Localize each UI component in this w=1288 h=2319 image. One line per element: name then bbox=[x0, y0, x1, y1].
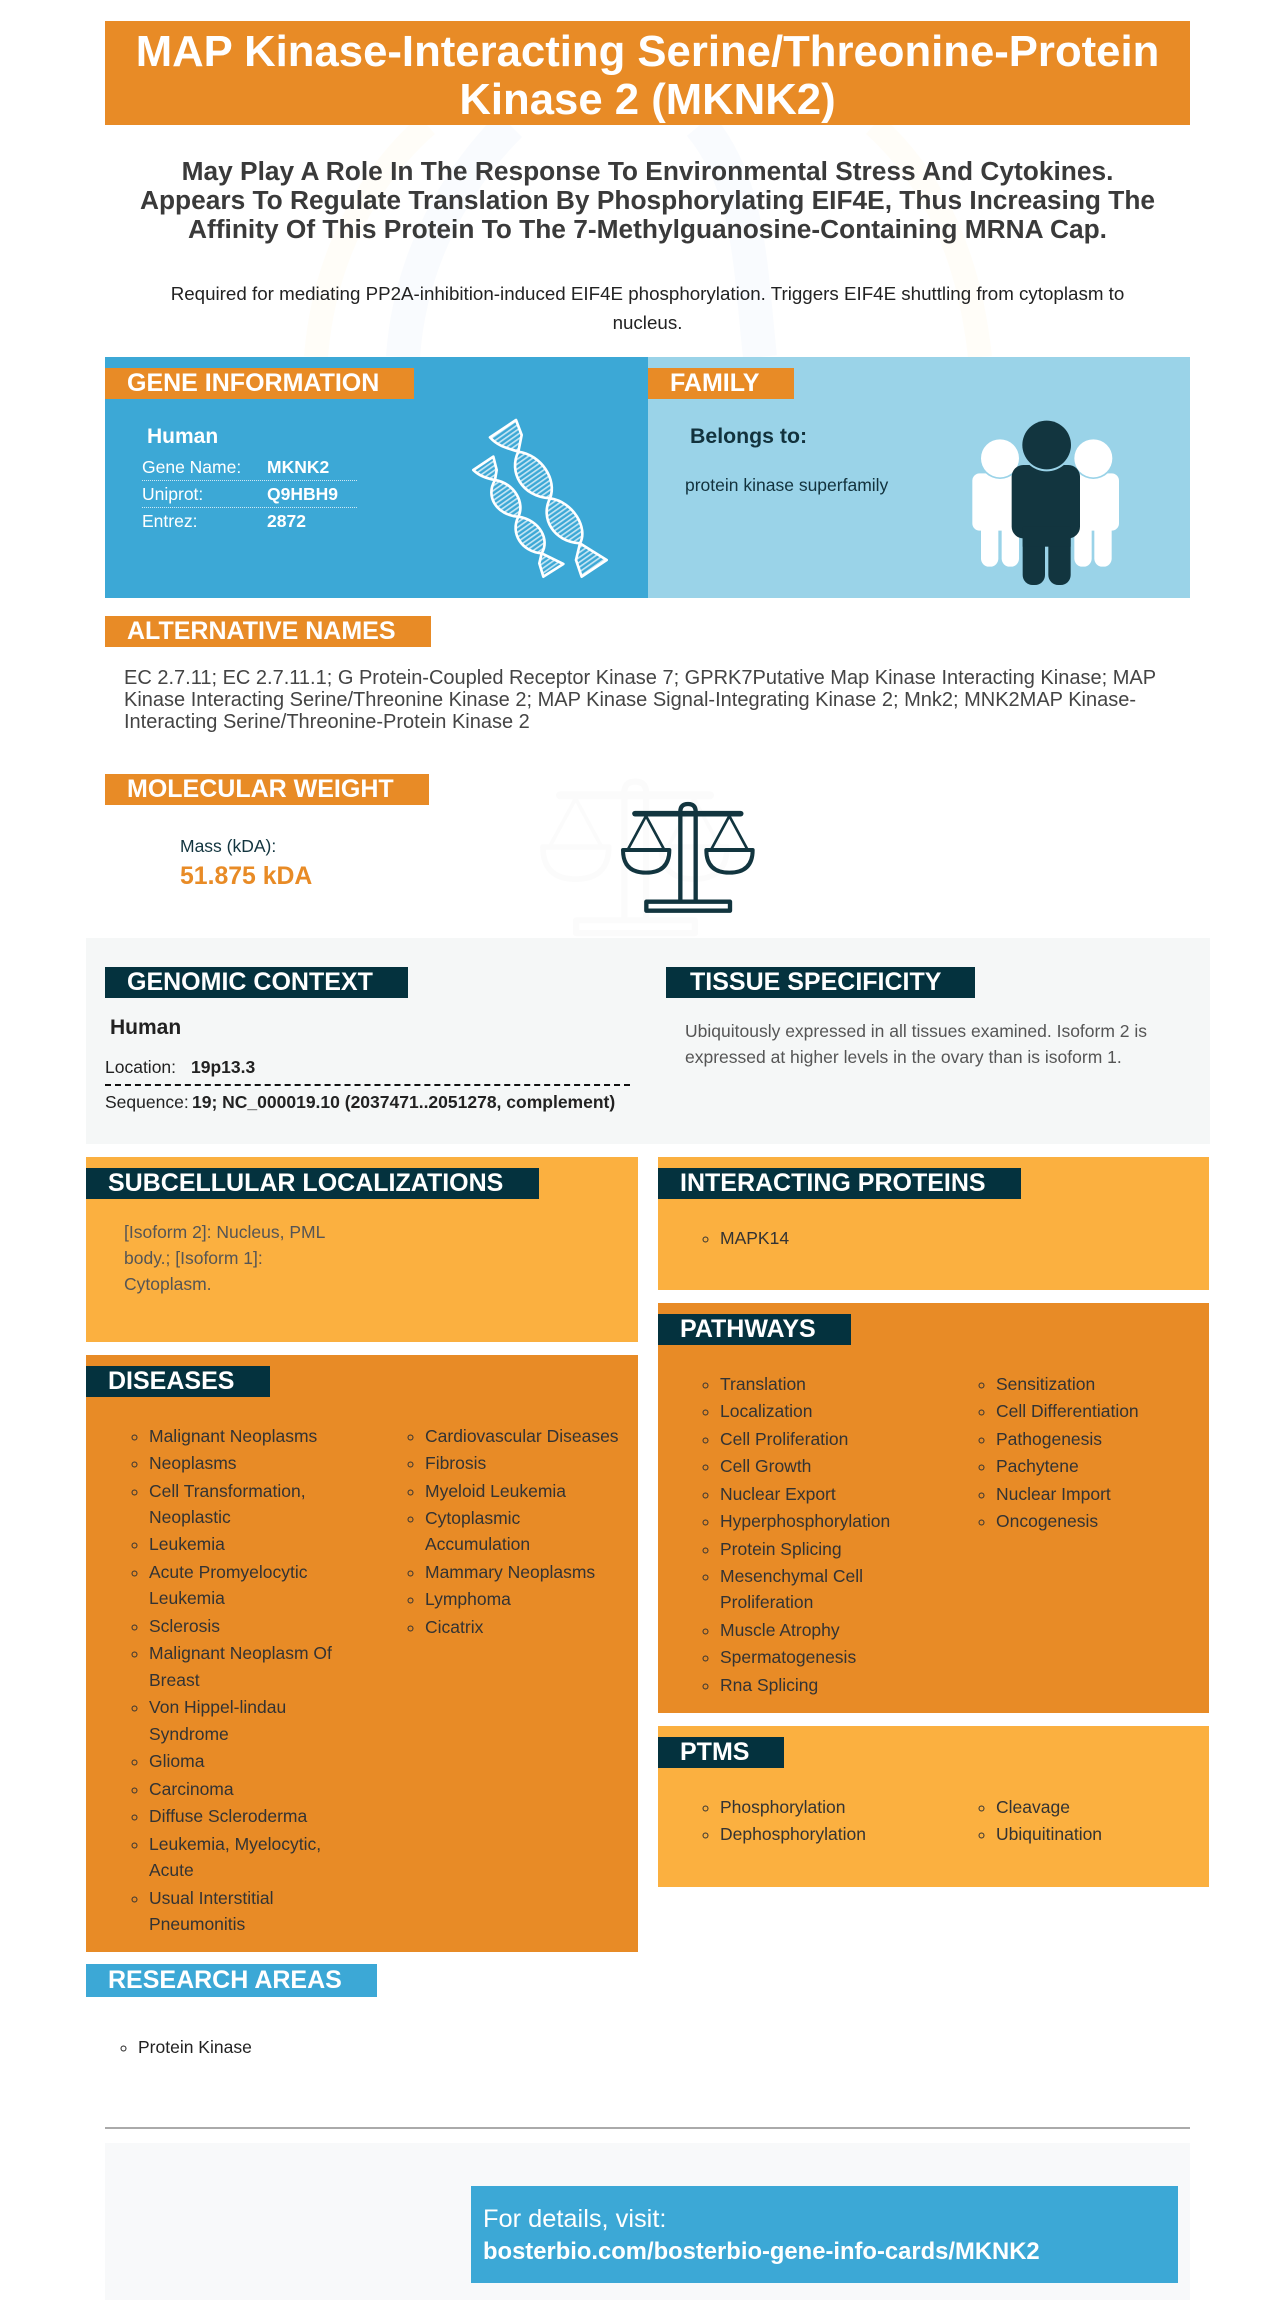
pathways list column 2: Pachytene bbox=[996, 1456, 1079, 1476]
diseases list column 1: Carcinoma bbox=[149, 1779, 234, 1799]
callout url: bosterbio.com/bosterbio-gene-info-cards/MKNK2 bbox=[483, 2238, 1040, 2265]
alternative names text: Kinase Interacting Serine/Threonine Kinase 2; MAP Kinase Signal-Integrating Kinase 2; Mnk2; MNK2MAP Kinase- bbox=[124, 689, 1136, 711]
pathways list column 1: Cell Proliferation bbox=[720, 1428, 848, 1448]
diseases list column 1: Leukemia bbox=[149, 1534, 225, 1554]
pathways list column 1: Mesenchymal Cell bbox=[720, 1566, 863, 1586]
genomic species: Human bbox=[110, 1016, 181, 1039]
gene name row: MKNK2 bbox=[267, 457, 329, 477]
gene name row bbox=[142, 455, 357, 481]
mass value: 51.875 kDA bbox=[180, 863, 312, 890]
diseases list column 2: Cardiovascular Diseases bbox=[425, 1426, 619, 1446]
pathways list column 2: Sensitization bbox=[996, 1374, 1095, 1394]
diseases list column 2: Accumulation bbox=[425, 1534, 530, 1554]
diseases list column 1: Breast bbox=[149, 1670, 200, 1690]
icon: people bbox=[972, 420, 1119, 585]
heading: diseases: DISEASES bbox=[108, 1367, 234, 1395]
diseases list column 1: Acute bbox=[149, 1860, 194, 1880]
alternative names text: Interacting Serine/Threonine-Protein Kinase 2 bbox=[124, 711, 530, 733]
tissue specificity text bbox=[685, 1021, 1147, 1067]
uniprot row bbox=[142, 482, 357, 508]
background watermark bbox=[300, 125, 1000, 357]
alternative names text bbox=[124, 667, 1156, 733]
diseases list column 1: Malignant Neoplasm Of bbox=[149, 1643, 332, 1663]
heading: genomic context: GENOMIC CONTEXT bbox=[127, 968, 373, 996]
diseases list column 2: Fibrosis bbox=[425, 1453, 486, 1473]
heading: diseases bbox=[86, 1366, 270, 1397]
panel: genomic context and tissue specificity bbox=[86, 938, 1210, 1144]
divider dashed bbox=[105, 1084, 630, 1086]
entrez row bbox=[142, 511, 306, 531]
callout label: For details, visit: bbox=[483, 2205, 666, 2233]
pathways list column 1: Cell Growth bbox=[720, 1456, 811, 1476]
heading: family: FAMILY bbox=[670, 369, 759, 397]
heading: ptms bbox=[658, 1737, 784, 1768]
pathways list column 2: Pathogenesis bbox=[996, 1428, 1102, 1448]
panel: genomic context and tissue specificity: 19p13.3 bbox=[191, 1057, 255, 1077]
heading: tissue specificity: TISSUE SPECIFICITY bbox=[690, 968, 941, 996]
gene name row: Gene Name: bbox=[142, 457, 241, 477]
tissue specificity text: Ubiquitously expressed in all tissues examined. Isoform 2 is bbox=[685, 1021, 1147, 1041]
subcellular text: [Isoform 2]: Nucleus, PML bbox=[124, 1222, 325, 1242]
mass label: Mass (kDA): bbox=[180, 836, 276, 856]
diseases list column 2: Lymphoma bbox=[425, 1589, 511, 1609]
pathways list column 1: Rna Splicing bbox=[720, 1675, 818, 1695]
ptms list column 1: Phosphorylation bbox=[720, 1796, 846, 1816]
panel: footer bbox=[105, 2143, 1190, 2300]
pathways list column 1: Hyperphosphorylation bbox=[720, 1511, 890, 1531]
description: Required for mediating PP2A-inhibition-induced EIF4E phosphorylation. Triggers EIF4E shuttling from cytoplasm to bbox=[171, 283, 1124, 304]
heading: research areas bbox=[86, 1964, 377, 1997]
diseases list column 1: Acute Promyelocytic bbox=[149, 1562, 308, 1582]
subtitle: May Play A Role In The Response To Environmental Stress And Cytokines. bbox=[182, 156, 1113, 186]
sequence row: Sequence: bbox=[105, 1092, 189, 1112]
diseases list column 2 bbox=[408, 1426, 619, 1637]
diseases list column 1: Usual Interstitial bbox=[149, 1888, 274, 1908]
callout: details link bbox=[471, 2186, 1178, 2283]
icon: scale bbox=[621, 802, 755, 913]
subcellular text: Cytoplasm. bbox=[124, 1274, 212, 1294]
panel: family bbox=[648, 357, 1190, 598]
pathways list column 1: Nuclear Export bbox=[720, 1484, 836, 1504]
heading: alternative names: ALTERNATIVE NAMES bbox=[127, 617, 396, 645]
diseases list column 1: Diffuse Scleroderma bbox=[149, 1806, 307, 1826]
ptms list column 2 bbox=[978, 1796, 1102, 1844]
pathways list column 2 bbox=[978, 1374, 1139, 1531]
belongs to label: Belongs to: bbox=[690, 424, 807, 448]
pathways list column 2: Cell Differentiation bbox=[996, 1401, 1139, 1421]
pathways list column 1: Muscle Atrophy bbox=[720, 1620, 840, 1640]
subtitle: Affinity Of This Protein To The 7-Methylguanosine-Containing MRNA Cap. bbox=[188, 214, 1107, 244]
uniprot row: Uniprot: bbox=[142, 484, 203, 504]
heading: pathways: PATHWAYS bbox=[680, 1315, 816, 1343]
diseases list column 2: Cytoplasmic bbox=[425, 1508, 520, 1528]
subcellular text: body.; [Isoform 1]: bbox=[124, 1248, 263, 1268]
ptms list column 2: Cleavage bbox=[996, 1796, 1070, 1816]
panel: gene information bbox=[105, 357, 648, 598]
diseases list column 2: Mammary Neoplasms bbox=[425, 1562, 595, 1582]
location row bbox=[105, 1057, 255, 1077]
diseases list column 1: Pneumonitis bbox=[149, 1914, 245, 1934]
pathways list column 1: Translation bbox=[720, 1374, 806, 1394]
diseases list column 1: Cell Transformation, bbox=[149, 1480, 306, 1500]
diseases list column 1: Leukemia, Myelocytic, bbox=[149, 1834, 321, 1854]
icon: dna bbox=[472, 418, 608, 578]
diseases list column 1: Leukemia bbox=[149, 1588, 225, 1608]
heading: ptms: PTMS bbox=[680, 1738, 749, 1766]
heading: interacting proteins: INTERACTING PROTEINS bbox=[680, 1169, 986, 1197]
heading: pathways bbox=[658, 1314, 851, 1345]
panel: genomic context and tissue specificity: 19; NC_000019.10 (2037471..2051278, complement) bbox=[192, 1092, 615, 1112]
diseases list column 1: Neoplastic bbox=[149, 1507, 231, 1527]
description: nucleus. bbox=[613, 312, 682, 333]
entrez row: 2872 bbox=[267, 511, 306, 531]
panel: diseases bbox=[86, 1355, 638, 1952]
panel: interacting proteins bbox=[658, 1157, 1209, 1290]
pathways list column 1: Protein Splicing bbox=[720, 1538, 842, 1558]
diseases list column 1: Sclerosis bbox=[149, 1616, 220, 1636]
panel: pathways bbox=[658, 1303, 1209, 1713]
title: MAP Kinase-Interacting Serine/Threonine-Protein bbox=[136, 27, 1159, 76]
diseases list column 1 bbox=[132, 1426, 332, 1934]
heading: subcellular localizations: SUBCELLULAR LOCALIZATIONS bbox=[108, 1169, 503, 1197]
sequence row bbox=[105, 1092, 615, 1112]
diseases list column 1: Malignant Neoplasms bbox=[149, 1426, 317, 1446]
heading: gene information: GENE INFORMATION bbox=[127, 369, 379, 397]
diseases list column 2: Myeloid Leukemia bbox=[425, 1480, 566, 1500]
diseases list column 1: Syndrome bbox=[149, 1724, 229, 1744]
subcellular text bbox=[124, 1222, 325, 1294]
diseases list column 1: Glioma bbox=[149, 1751, 204, 1771]
subtitle: Appears To Regulate Translation By Phosphorylating EIF4E, Thus Increasing The bbox=[140, 185, 1155, 215]
footer rule bbox=[105, 2127, 1190, 2129]
pathways list column 2: Oncogenesis bbox=[996, 1511, 1098, 1531]
description bbox=[171, 283, 1124, 333]
family name: protein kinase superfamily bbox=[685, 475, 888, 495]
entrez row: Entrez: bbox=[142, 511, 197, 531]
diseases list column 1: Neoplasms bbox=[149, 1453, 237, 1473]
tissue specificity text: expressed at higher levels in the ovary than is isoform 1. bbox=[685, 1047, 1122, 1067]
pathways list column 1: Spermatogenesis bbox=[720, 1647, 856, 1667]
heading: molecular weight: MOLECULAR WEIGHT bbox=[127, 775, 394, 803]
heading: research areas: RESEARCH AREAS bbox=[108, 1966, 342, 1994]
research areas list: Protein Kinase bbox=[138, 2037, 252, 2057]
panel: subcellular localizations bbox=[86, 1157, 638, 1342]
gene species: Human bbox=[147, 425, 218, 448]
diseases list column 1: Von Hippel-lindau bbox=[149, 1697, 286, 1717]
ptms list column 2: Ubiquitination bbox=[996, 1824, 1102, 1844]
title bbox=[105, 21, 1190, 125]
pathways list column 2: Nuclear Import bbox=[996, 1484, 1111, 1504]
panel: ptms bbox=[658, 1726, 1209, 1887]
ptms list column 1: Dephosphorylation bbox=[720, 1824, 866, 1844]
uniprot row: Q9HBH9 bbox=[267, 484, 338, 504]
pathways list column 1 bbox=[702, 1374, 890, 1695]
heading: family bbox=[648, 368, 794, 399]
pathways list column 1: Proliferation bbox=[720, 1592, 813, 1612]
location row: Location: bbox=[105, 1057, 176, 1077]
diseases list column 2: Cicatrix bbox=[425, 1617, 483, 1637]
ptms list column 1 bbox=[702, 1796, 866, 1844]
interacting list: MAPK14 bbox=[720, 1228, 789, 1248]
subtitle bbox=[140, 156, 1155, 244]
pathways list column 1: Localization bbox=[720, 1401, 812, 1421]
alternative names text: EC 2.7.11; EC 2.7.11.1; G Protein-Coupled Receptor Kinase 7; GPRK7Putative Map Kinase Interacting Kinase; MAP bbox=[124, 667, 1156, 689]
title: Kinase 2 (MKNK2) bbox=[459, 75, 836, 124]
